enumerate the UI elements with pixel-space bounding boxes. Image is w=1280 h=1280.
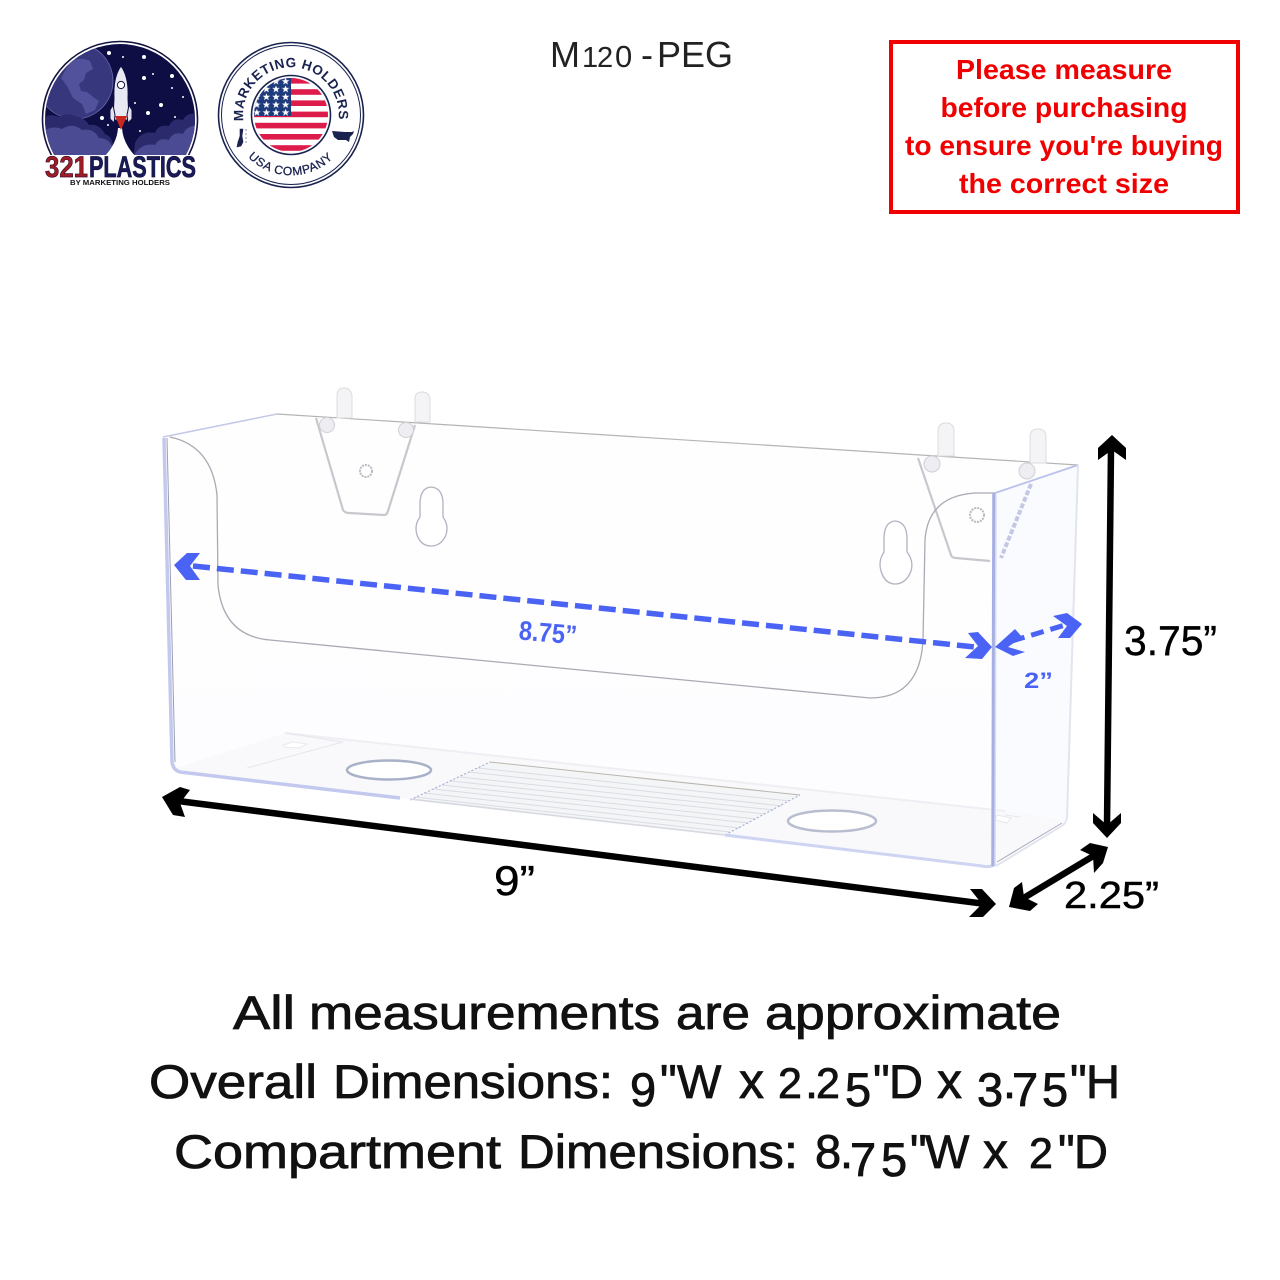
ribbed panel (410, 762, 800, 835)
line: compartment dimensions: 8 (815, 1125, 841, 1178)
floor holes (347, 760, 431, 780)
rocket (110, 66, 132, 130)
line: compartment dimensions: 7 (850, 1133, 876, 1186)
line: overall dimensions: . (1003, 1055, 1016, 1108)
callout: measure before purchasing: the correct size (959, 168, 1169, 199)
line: approximate note: All (233, 986, 295, 1039)
arrow: 3.75 inch height (1093, 435, 1126, 838)
line: overall dimensions: 5 (1042, 1063, 1068, 1116)
back wall and floor (163, 414, 1078, 868)
line: compartment dimensions: . (840, 1125, 853, 1178)
callout: measure before purchasing (891, 42, 1238, 212)
label: 8.75 inch: 8.75” (518, 616, 578, 650)
line: compartment dimensions: 2 (1029, 1130, 1053, 1178)
line: overall dimensions: " (1070, 1055, 1087, 1108)
side wall edge (996, 465, 1078, 866)
title: product code: M (550, 34, 580, 75)
front bottom edge (410, 799, 725, 835)
text block: measurements (149, 986, 1120, 1186)
label: 3.75 inch: 3.75” (1124, 617, 1217, 664)
logo: Marketing Holders USA company seal: USA COMPANY (250, 152, 330, 176)
logo: 321 Plastics (42, 40, 198, 185)
front wall with cutout (170, 437, 995, 698)
flag (254, 78, 328, 151)
stars (100, 51, 184, 132)
line: approximate note: approximate (765, 986, 1061, 1039)
line: compartment dimensions (174, 1123, 1108, 1186)
front right edge (993, 493, 994, 866)
pegs (337, 388, 1046, 463)
line: overall dimensions: D (889, 1055, 923, 1108)
title: product code: 0 (615, 39, 632, 74)
line: compartment dimensions: D (1074, 1125, 1108, 1178)
callout: measure before purchasing: Please measure (956, 54, 1172, 85)
line: overall dimensions: 9 (630, 1063, 656, 1116)
label: 2 inch: 2” (1024, 668, 1053, 693)
arrow: 2 inch compartment depth (995, 613, 1082, 656)
line: overall dimensions: . (805, 1055, 818, 1108)
line: overall dimensions: Overall (149, 1055, 317, 1108)
line: approximate note: are (676, 986, 750, 1039)
line: overall dimensions: Dimensions: (333, 1055, 613, 1108)
callout: measure before purchasing: to ensure you're buying (905, 130, 1223, 161)
arrow: 2.25 inch depth (1009, 843, 1108, 911)
title: product code: - (641, 34, 653, 75)
logo: 321 Plastics: PLASTICS (89, 151, 196, 184)
mount bracket left (316, 418, 415, 515)
line: overall dimensions: 3 (977, 1063, 1003, 1116)
icon: rocket mark (237, 129, 247, 147)
mount bracket right (918, 456, 1035, 561)
line: compartment dimensions: W (925, 1125, 970, 1178)
line: approximate note (233, 986, 1061, 1039)
title: product code: 2 (597, 42, 613, 74)
line: compartment dimensions: " (1058, 1125, 1075, 1178)
line: overall dimensions: 2 (778, 1060, 802, 1108)
title: product code: PEG (657, 34, 733, 75)
line: overall dimensions: x (937, 1053, 962, 1109)
line: compartment dimensions: Dimensions: (518, 1125, 798, 1178)
keyholes (416, 487, 447, 546)
line: compartment dimensions: 5 (881, 1133, 907, 1186)
logo: Marketing Holders USA company seal: MARKETING HOLDERS (234, 58, 348, 120)
line: overall dimensions: H (1086, 1055, 1120, 1108)
line: overall dimensions: " (873, 1055, 890, 1108)
label: 9 inch: 9” (494, 857, 535, 904)
arrow: 8.75 inch compartment width (174, 553, 992, 659)
line: compartment dimensions: x (983, 1123, 1008, 1179)
title: product code: 1 (582, 42, 598, 74)
label: 2.25 inch: 2.25” (1064, 875, 1159, 917)
line: overall dimensions: 7 (1012, 1063, 1038, 1116)
top edge (277, 414, 1078, 465)
front left edge (164, 438, 400, 798)
callout: measure before purchasing: before purchasing (940, 92, 1188, 123)
floor (173, 733, 1064, 866)
logo: 321 Plastics: BY MARKETING HOLDERS (70, 180, 170, 187)
line: overall dimensions: W (677, 1055, 722, 1108)
arrow: 9 inch width (162, 787, 996, 917)
line: compartment dimensions: Compartment (174, 1125, 501, 1178)
line: overall dimensions: " (660, 1055, 677, 1108)
line: overall dimensions: 2 (816, 1060, 840, 1108)
icon: USA map (332, 131, 354, 142)
line: overall dimensions: 5 (845, 1063, 871, 1116)
line: approximate note: measurements (309, 986, 660, 1039)
logo: 321 Plastics: 321 (45, 151, 88, 184)
logo: Marketing Holders USA company seal (218, 42, 364, 188)
line: compartment dimensions: " (910, 1125, 927, 1178)
line: overall dimensions: x (739, 1053, 764, 1109)
side wall (996, 465, 1078, 862)
product: clear acrylic holder (163, 388, 1078, 868)
line: overall dimensions (149, 1053, 1120, 1116)
